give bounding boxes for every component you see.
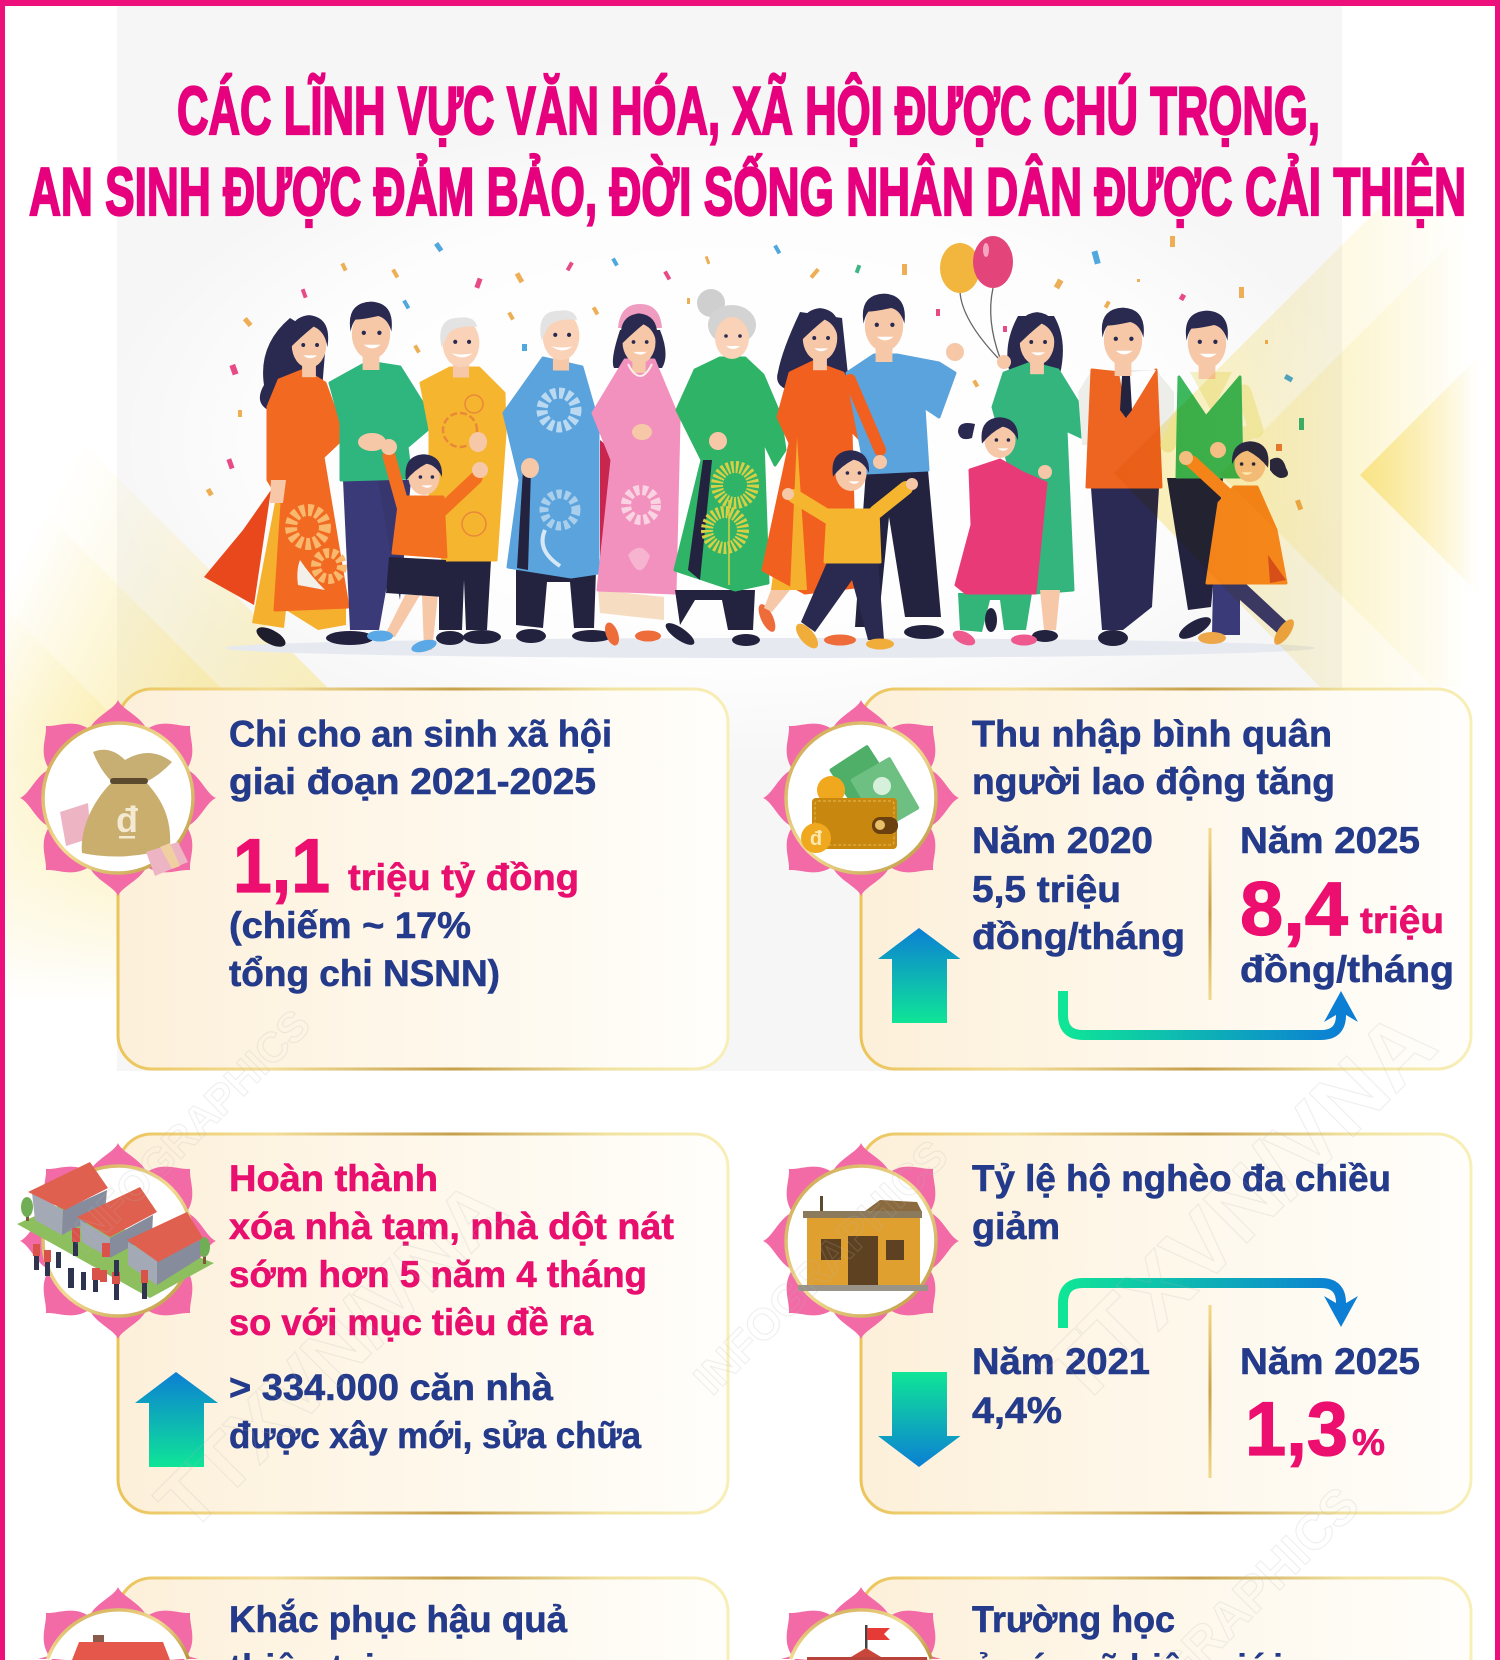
arrow: up (135, 1372, 218, 1467)
person: woman in orange ao dai (204, 315, 348, 651)
arrow: down (878, 1372, 960, 1467)
year 2020 value (972, 820, 1185, 957)
year 2025 value: 8,4 (1240, 867, 1348, 952)
text: completed: sớm hơn 5 năm 4 tháng (229, 1254, 647, 1295)
panel: border schools (768, 1578, 1471, 1660)
person: man in orange vest (1078, 308, 1174, 646)
watermarks (58, 993, 1455, 1660)
person: girl in pink (951, 417, 1052, 649)
person: man in green shirt (326, 302, 427, 645)
panel: housing programme (17, 1134, 728, 1513)
icon: money bag (20, 700, 216, 896)
key figure: 1,1 (233, 824, 330, 909)
year 2025 value: Năm 2025 (1240, 820, 1420, 861)
note: tổng chi NSNN) (229, 953, 500, 994)
illustration: family in ao dai (204, 236, 1315, 658)
person: man in blue shirt (847, 294, 964, 639)
ground shadow (225, 638, 1315, 658)
heading: Thu nhập bình quân (972, 714, 1332, 754)
person: girl in orange, right (1179, 441, 1298, 648)
icon: money bag: đ (116, 799, 138, 840)
heading: Khắc phục hậu quả (229, 1598, 567, 1640)
person: man in green vest (1167, 311, 1256, 643)
text: number of houses (229, 1367, 641, 1456)
year 2025 value: triệu (1360, 900, 1444, 941)
year 2025 value: Năm 2025 (1240, 1341, 1420, 1382)
person: woman in orange ao dai, right (755, 308, 874, 646)
year 2020 value: đồng/tháng (972, 916, 1185, 957)
watermarks: TTXVN/VNA (139, 1164, 523, 1547)
year 2025 value: % (1352, 1422, 1385, 1463)
confetti (206, 236, 1304, 510)
text: number of houses: được xây mới, sửa chữa (229, 1415, 641, 1456)
year 2025 value (1240, 820, 1454, 990)
decorative gold rays left (5, 400, 327, 1002)
text: completed: Hoàn thành (229, 1158, 438, 1199)
title (29, 72, 1466, 230)
decorative gold rays right (1114, 187, 1495, 687)
panel: multidimensional poverty (763, 1134, 1471, 1513)
icon: house (25, 1587, 211, 1660)
year 2021 value: 4,4% (972, 1390, 1062, 1431)
icon: wallet with banknotes (763, 700, 959, 896)
watermarks: TTXVN/VNA (1023, 993, 1455, 1424)
watermarks: INFOGRAPHICS (684, 1131, 958, 1404)
year 2021 value (972, 1341, 1150, 1431)
year 2025 value: đồng/tháng (1240, 949, 1454, 990)
person: child in yellow (782, 450, 918, 652)
icon: new houses (17, 1143, 216, 1339)
year 2020 value: 5,5 triệu (972, 869, 1121, 910)
watermarks: INFOGRAPHICS (58, 1000, 319, 1261)
background panel (90, 6, 1370, 1071)
year 2020 value: Năm 2020 (972, 820, 1153, 861)
note: (chiếm ~ 17% (229, 905, 471, 946)
arrow: elbow from 2021 to 2025 (1063, 1283, 1358, 1328)
person: child in orange with raised arms (367, 439, 488, 655)
panel: average income (763, 689, 1471, 1069)
heading: người lao động tăng (972, 761, 1335, 802)
icon: school (768, 1587, 954, 1660)
icon: wallet with banknotes: đ (810, 828, 823, 850)
heading: giai đoạn 2021-2025 (229, 761, 596, 802)
person: grandmother in green ao dai (663, 289, 785, 649)
key figure (233, 824, 579, 909)
heading (229, 714, 612, 802)
year 2025 value (1240, 1341, 1420, 1472)
year 2021 value: Năm 2021 (972, 1341, 1150, 1382)
text: number of houses: > 334.000 căn nhà (229, 1367, 553, 1408)
heading: Tỷ lệ hộ nghèo đa chiều (972, 1158, 1391, 1199)
person: woman in green, right (993, 312, 1087, 642)
icon: dilapidated house (763, 1143, 959, 1339)
heading: Trường học (972, 1599, 1175, 1640)
year 2025 value: 1,3 (1245, 1387, 1348, 1472)
key figure: triệu tỷ đồng (348, 857, 579, 898)
person: woman in pink ao dai (593, 304, 679, 647)
heading: giảm (972, 1206, 1060, 1247)
text: completed: so với mục tiêu đề ra (229, 1302, 593, 1343)
arrow: elbow from 2020 to 2025 (1063, 991, 1358, 1035)
panel: disaster recovery (25, 1578, 728, 1660)
panel: social security spending (20, 689, 728, 1069)
person: grandfather in blue robe (504, 310, 612, 643)
heading (972, 714, 1335, 802)
person: grandfather in yellow robe (421, 317, 505, 645)
text: completed (229, 1158, 674, 1343)
heading: Chi cho an sinh xã hội (229, 714, 612, 754)
heading (972, 1158, 1391, 1247)
note (229, 905, 500, 994)
arrow: up (878, 928, 960, 1023)
text: completed: xóa nhà tạm, nhà dột nát (229, 1206, 674, 1247)
balloons (940, 236, 1013, 358)
